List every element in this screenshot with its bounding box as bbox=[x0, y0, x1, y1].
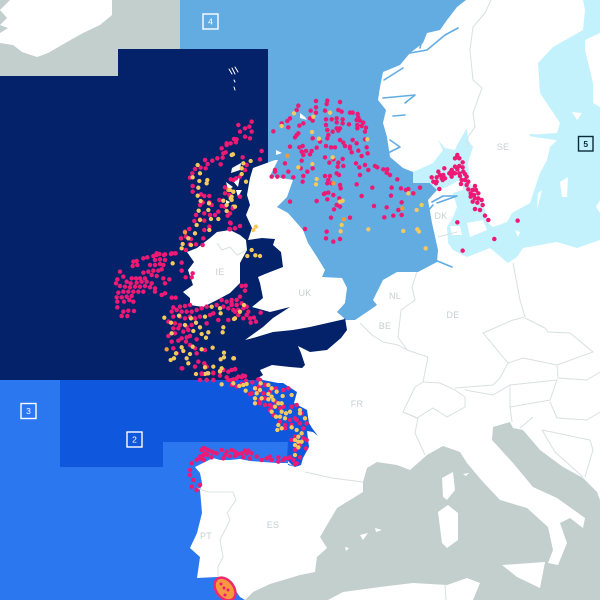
zone marker 3 bbox=[21, 404, 36, 418]
zone marker 4 bbox=[203, 14, 218, 29]
dots: skagerrak and south-east north sea bbox=[401, 188, 426, 248]
land: iceland bbox=[0, 0, 112, 57]
dots: north sea bbox=[272, 101, 398, 242]
zone 2: bay of biscay blue bbox=[60, 380, 318, 467]
zone marker 4: 4 bbox=[208, 16, 213, 26]
zone marker 5: 5 bbox=[583, 139, 588, 149]
country labels: SE bbox=[497, 142, 509, 152]
zone marker 5 bbox=[578, 136, 593, 151]
zone 5: baltic and kattegat bbox=[413, 0, 600, 263]
country labels: PT bbox=[200, 531, 212, 541]
country labels: DK bbox=[434, 211, 448, 221]
land: mediterranean islands bbox=[345, 472, 545, 588]
zone 4: north sea bbox=[180, 0, 466, 320]
dots: inner hebrides and north channel bbox=[222, 122, 262, 256]
dots: kattegat bbox=[432, 155, 518, 251]
country labels: NL bbox=[389, 291, 401, 301]
country labels: IE bbox=[215, 267, 225, 277]
dots: bay of biscay and cantabrian sea bbox=[200, 371, 307, 464]
country labels bbox=[200, 142, 509, 541]
dots cluster: gulf of cadiz bbox=[209, 572, 241, 600]
zone marker 2 bbox=[127, 432, 142, 447]
faroe islands bbox=[229, 67, 238, 90]
land: ireland bbox=[183, 230, 247, 307]
zone marker 3: 3 bbox=[26, 406, 31, 416]
country labels: UK bbox=[298, 288, 312, 298]
land: great britain bbox=[245, 160, 347, 340]
dots: irish sea and english channel approaches bbox=[232, 286, 261, 380]
dots: atlantic west of ireland and celtic sea bbox=[116, 253, 238, 377]
dots: galicia coast bbox=[182, 368, 213, 490]
zone 3: atlantic bright blue bbox=[0, 380, 295, 600]
country labels: FR bbox=[351, 399, 363, 409]
dots: scottish west coast bbox=[157, 139, 236, 254]
country borders bbox=[197, 0, 600, 600]
norway fjords and inlets bbox=[383, 28, 458, 267]
grey mediterranean sea bbox=[245, 422, 600, 600]
country labels: ES bbox=[267, 520, 279, 530]
zone marker 2: 2 bbox=[132, 434, 137, 444]
panel: grey north atlantic corner bbox=[0, 0, 181, 80]
stockholm inlet bbox=[530, 135, 557, 139]
zone 1: dark navy waters bbox=[0, 49, 347, 380]
country labels: DE bbox=[446, 310, 460, 320]
country labels: BE bbox=[379, 321, 391, 331]
land: denmark and baltic islands bbox=[450, 33, 600, 237]
land: small scottish islands bbox=[226, 113, 307, 206]
